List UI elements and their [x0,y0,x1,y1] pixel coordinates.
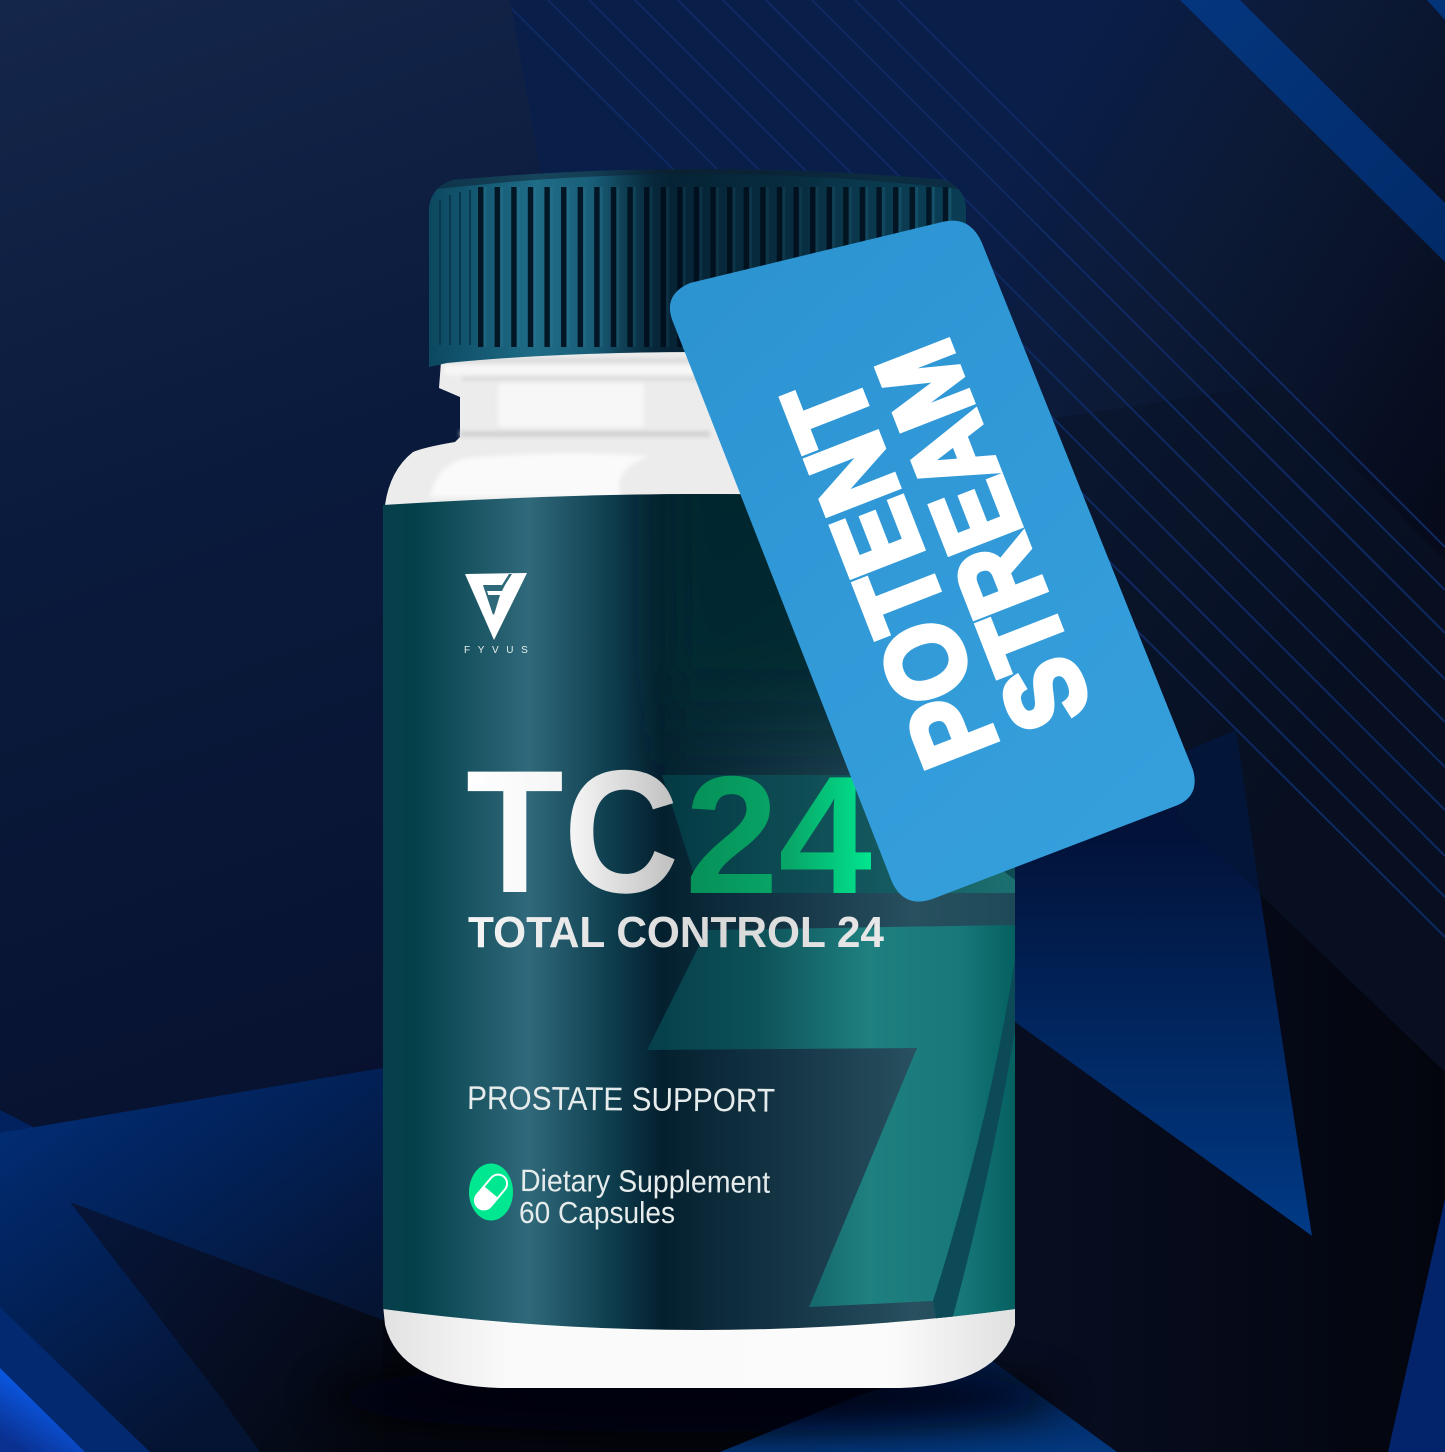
logo: FYVUS [464,645,535,656]
title: TOTAL CONTROL 24 [468,908,885,957]
tag text: potent: POTENT [760,361,1021,782]
icon: capsule [469,1164,513,1220]
subtitle: PROSTATE SUPPORT [467,1079,775,1119]
supplement text [519,1163,771,1230]
supplement text: Dietary Supplement [520,1163,771,1200]
shadow [320,1364,1060,1432]
label [383,494,1015,1330]
supplement text: 60 Capsules [519,1195,675,1230]
tag: blue card [670,221,1195,902]
bottle neck and shoulder [385,340,790,505]
cap [425,160,970,370]
TC24 [466,735,872,930]
bottle base [383,1305,1015,1388]
TC24: TC [466,735,679,930]
logo [464,573,535,656]
bottle [383,160,1065,1388]
TC24: 24 [685,741,872,929]
tag text: stream: STREAM [853,326,1114,746]
